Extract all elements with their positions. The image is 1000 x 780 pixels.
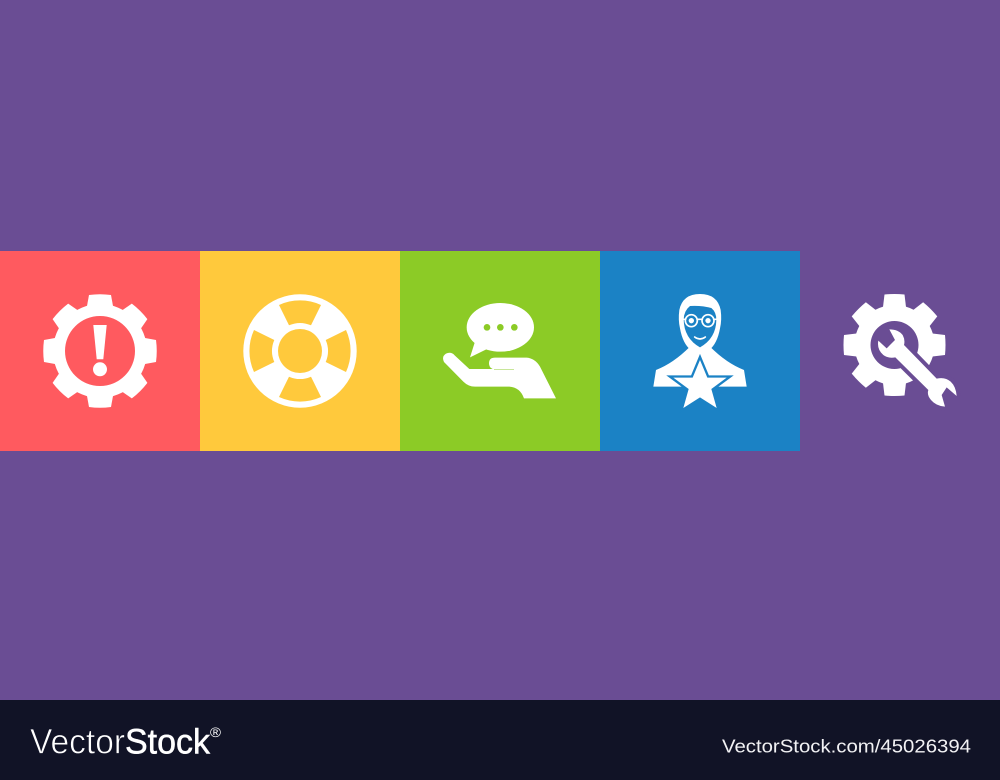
logo: VectorStock: ® — [210, 724, 222, 740]
panel: yellow lifebuoy — [200, 251, 400, 451]
icon: person with glasses and star — [653, 294, 747, 408]
wrench — [878, 329, 957, 407]
face — [684, 306, 716, 347]
icon: gear with exclamation mark — [43, 294, 157, 408]
footer bar — [0, 700, 1000, 780]
panel: blue star person — [600, 251, 800, 451]
shoulders — [653, 347, 747, 387]
smile — [695, 337, 705, 339]
star — [673, 360, 727, 408]
hand — [443, 353, 556, 398]
icon: speech bubble on open hand — [443, 303, 556, 398]
hair and head — [679, 294, 721, 350]
logo: VectorStock: Vector — [30, 722, 125, 762]
speech bubble — [467, 303, 534, 357]
icon: gear with wrench — [844, 294, 957, 407]
icon: lifebuoy — [243, 294, 357, 408]
panel: red warning gear — [0, 251, 200, 451]
logo: VectorStock: Stock — [125, 722, 210, 762]
glasses — [681, 315, 718, 327]
logo: VectorStock — [30, 722, 222, 762]
image id text: VectorStock.com/45026394 — [722, 735, 971, 756]
panel: green support hand — [400, 251, 600, 451]
